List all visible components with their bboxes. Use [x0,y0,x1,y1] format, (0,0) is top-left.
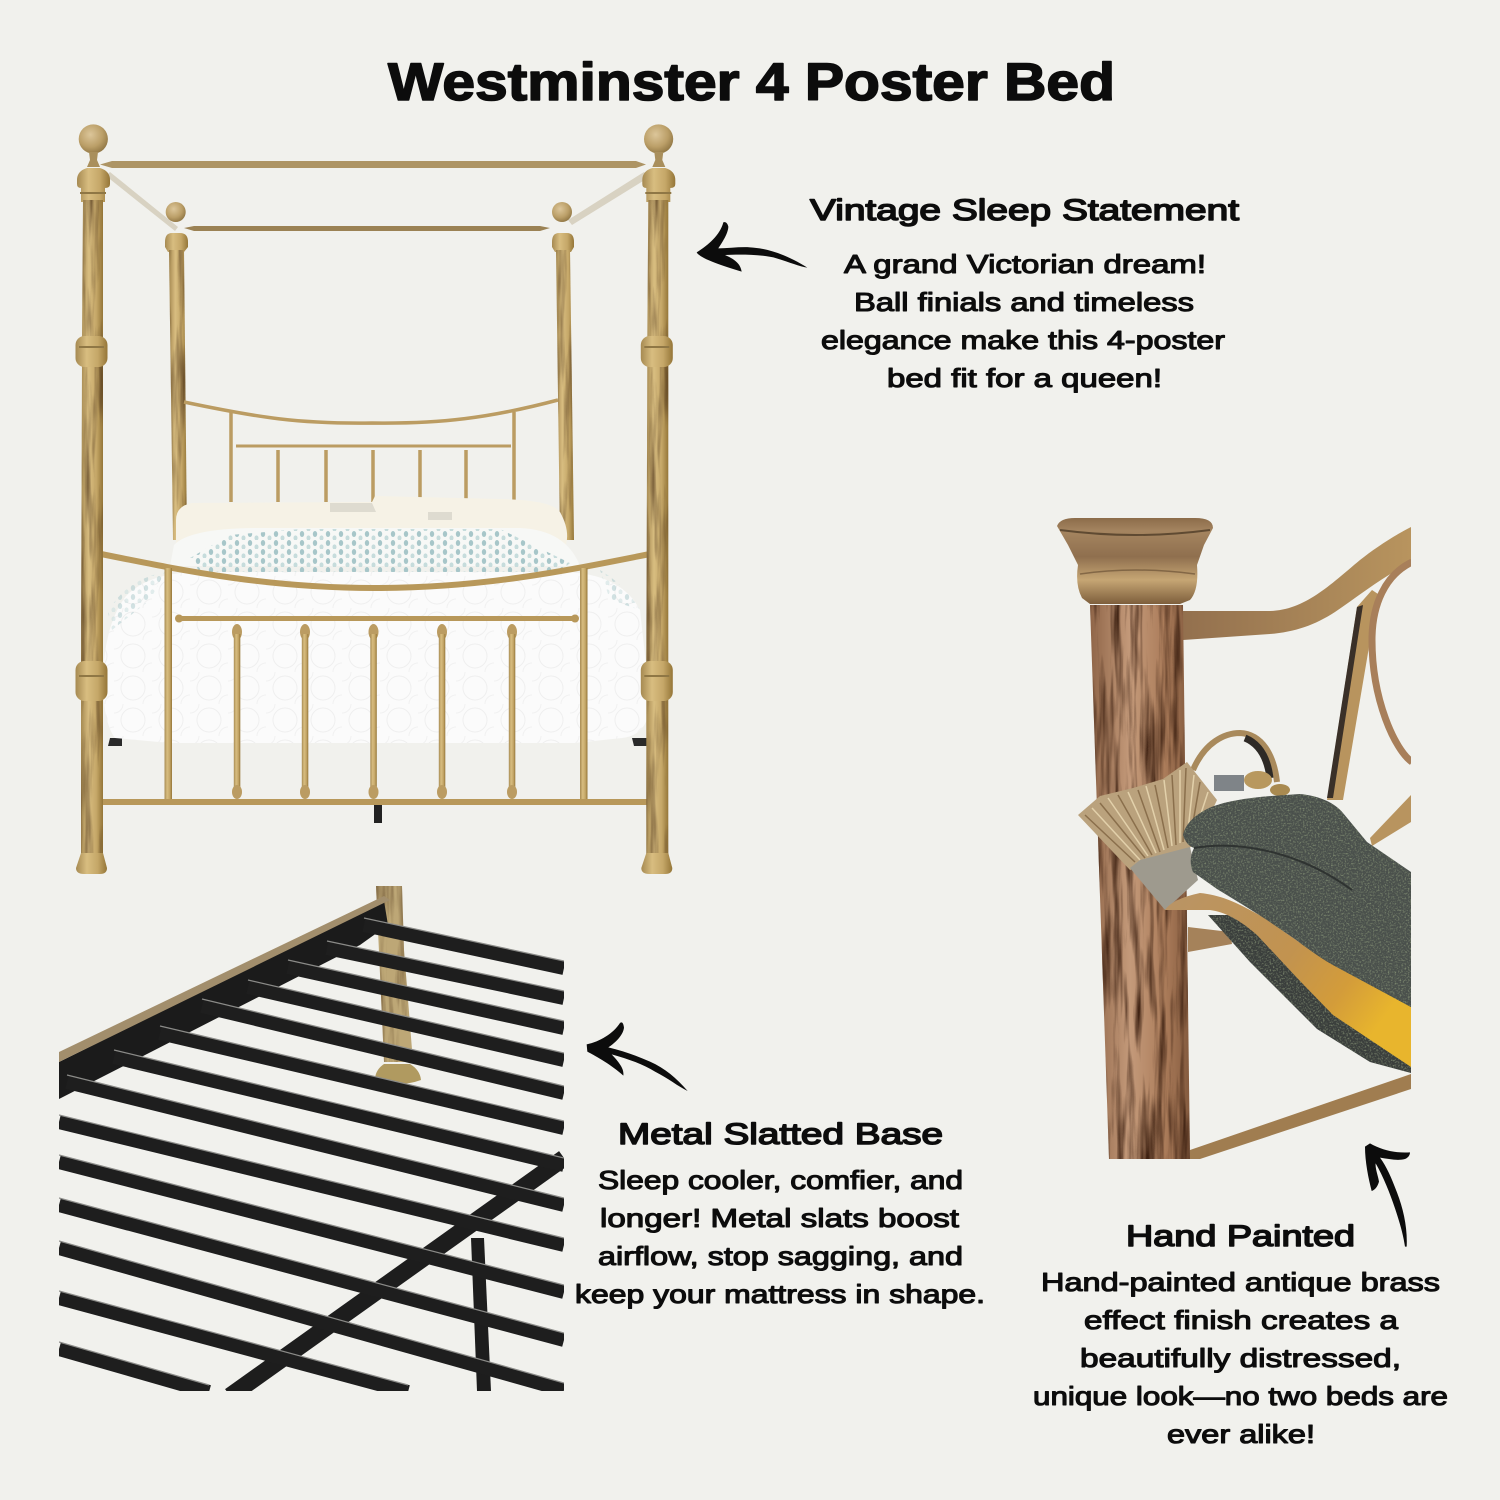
text block: vintage sleep statement [810,194,1240,393]
footboard [101,554,650,823]
lower glove [1208,915,1411,1073]
cross beam and leg [230,1158,564,1396]
pillows [176,496,567,545]
front right post [641,124,675,874]
brush handle [1165,893,1411,1067]
arrow: to slatted base [587,1022,688,1091]
heading: Hand Painted [1126,1220,1355,1253]
back posts [165,202,574,540]
front left post [76,124,110,874]
arrow: to hand painted photo [1365,1143,1410,1247]
brush bristles [1078,762,1217,870]
photo: metal slatted base [59,886,564,1396]
body copy: keep your mattress in shape. [575,1279,985,1309]
body copy: longer! Metal slats boost [600,1203,960,1233]
body copy: airflow, stop sagging, and [598,1241,963,1271]
duvet [103,570,650,746]
arrow: to bed canopy [697,222,807,272]
blanket [170,528,580,572]
slat highlights [59,918,564,1385]
body copy: beautifully distressed, [1080,1343,1401,1373]
heading: Vintage Sleep Statement [810,194,1240,227]
body copy: Hand-painted antique brass [1041,1267,1440,1297]
post cap [1057,518,1213,604]
body copy: elegance make this 4-poster [821,325,1225,355]
body copy [821,249,1225,393]
body copy: Sleep cooler, comfier, and [598,1165,963,1195]
text block: metal slatted base [575,1118,985,1309]
body copy: A grand Victorian dream! [844,249,1206,279]
body copy: bed fit for a queen! [887,363,1162,393]
title: Westminster 4 Poster Bed [388,53,1115,112]
photo: four poster bed [76,124,675,874]
body copy: effect finish creates a [1084,1305,1399,1335]
body copy: unique look—no two beds are [1033,1381,1448,1411]
curved rails behind [1183,527,1412,1159]
gold post behind slats [375,886,421,1084]
text block: hand painted [1033,1220,1448,1449]
body copy [575,1165,985,1309]
slats [59,925,564,1392]
canopy rails [100,161,648,231]
body copy: Ball finials and timeless [854,287,1194,317]
side rail [59,896,390,1099]
body copy [1033,1267,1448,1449]
buckle detail [1214,771,1290,796]
upper glove [1183,794,1411,1007]
headboard [184,400,558,502]
heading: Metal Slatted Base [618,1118,943,1151]
brush ferrule [1130,847,1198,910]
photo: hand painting the post [1057,518,1412,1159]
body copy: ever alike! [1167,1419,1315,1449]
post [1090,605,1190,1159]
